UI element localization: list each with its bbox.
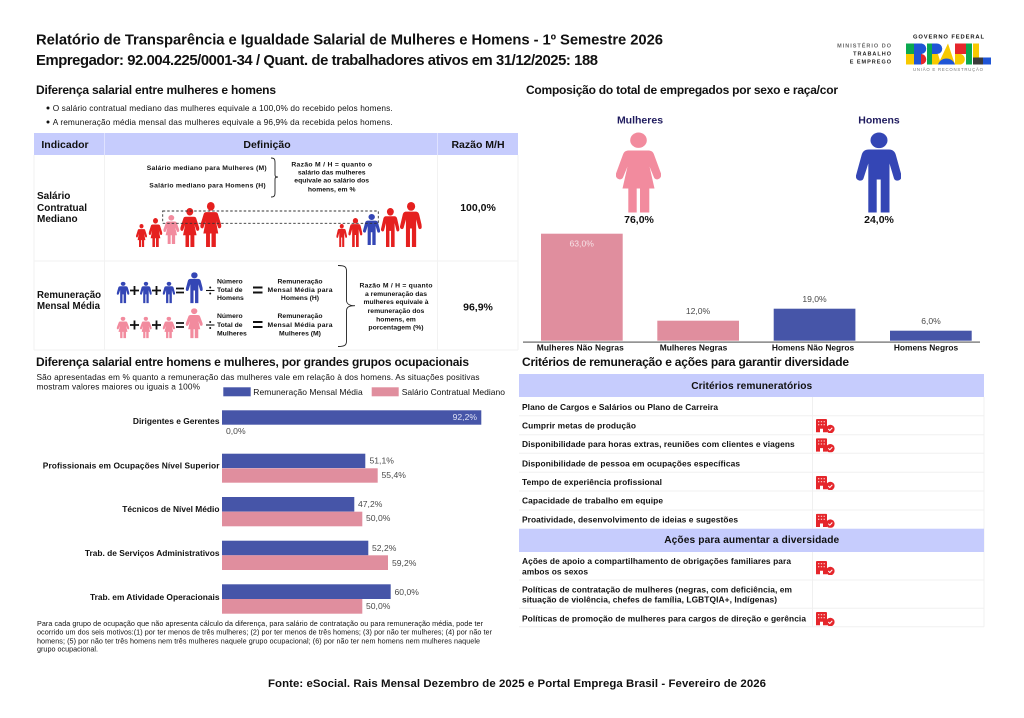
group: profissionais (43, 454, 406, 483)
header: critérios remuneratórios (519, 374, 984, 397)
group: atividade operacionais: 60,0% (394, 587, 419, 597)
group: técnicos: 50,0% (366, 513, 391, 523)
group: atividade operacionais (90, 584, 419, 614)
group: profissionais: 51,1% (370, 456, 394, 466)
row: remuneração mensal média: remuneração dos (368, 308, 425, 315)
formula: men: Número (217, 278, 243, 286)
group: técnicos: Técnicos de Nível Médio (122, 504, 220, 514)
group: serviços administrativos: 52,2% (372, 543, 397, 553)
formula: women: Mulheres (217, 330, 247, 338)
icon: women group (136, 202, 221, 247)
intro text: São apresentadas em % quanto a remuneração das mulheres vale em relação à dos homens. As situações positivas (36, 372, 480, 382)
panel: criteria table (519, 374, 984, 627)
action rows: situação de violência, chefes de família, LGBTQIA+, Indígenas) (522, 594, 777, 604)
group: técnicos: 47,2% (358, 499, 383, 509)
formula: women: Mulheres (M) (279, 330, 321, 338)
row: remuneração mensal média: homens, em (376, 316, 416, 324)
panel: indicator table (34, 133, 518, 350)
legend: Remuneração Mensal Média (253, 387, 363, 397)
logo: ministério: MINISTÉRIO DO (837, 41, 892, 49)
footnote: grupo ocupacional. (37, 645, 98, 654)
row: remuneração mensal média (37, 266, 494, 346)
action rows: Políticas de contratação de mulheres (negras, com deficiência, em (522, 585, 792, 595)
figure: mulheres 76%: 76,0% (624, 214, 655, 226)
row: remuneração mensal média: Razão M / H = quanto (360, 282, 432, 290)
icon: building check actions (816, 561, 835, 626)
group: serviços administrativos: 59,2% (392, 558, 417, 568)
group: atividade operacionais: 50,0% (366, 601, 391, 611)
header: ações (519, 529, 984, 552)
bar chart: sexo e raça/cor (523, 234, 980, 353)
bar chart: sexo e raça/cor: Mulheres Negras (660, 343, 728, 353)
row: salário contratual mediano: equivale ao salário dos (294, 178, 369, 184)
formula: women: Número (217, 313, 243, 320)
group: técnicos (122, 497, 391, 526)
table header: Razão M/H (451, 139, 505, 151)
criteria rows: Disponibilidade de pessoa em ocupações específicas (522, 458, 740, 468)
group: profissionais: Profissionais em Ocupações Nível Superior (43, 460, 220, 470)
row: remuneração mensal média: Mensal Média (37, 301, 101, 312)
icon: men group (336, 202, 422, 247)
logo: ministério: E EMPREGO (850, 60, 892, 66)
table header: Indicador (41, 139, 89, 151)
row: salário contratual mediano: Contratual (37, 203, 87, 214)
formula: men: Mensal Média para (268, 287, 333, 294)
action rows: ambos os sexos (522, 566, 588, 576)
title (36, 32, 663, 69)
action rows: Políticas de promoção de mulheres para cargos de direção e gerência (522, 614, 806, 624)
row: salário contratual mediano: homens, em % (308, 186, 355, 194)
row: remuneração mensal média: a remuneração das (365, 291, 427, 298)
logo: governo federal brasil (906, 34, 991, 72)
group: dirigentes (133, 410, 481, 436)
heading: grupos ocupacionais: Diferença salarial entre homens e mulheres, por grandes grupos ocupacionais (36, 355, 469, 369)
legend (223, 387, 505, 397)
footnote: homens; (5) por não ter três homens nem três mulheres naquele grupo ocupacional; (6) por não ter nem homens nem mulheres naquele (37, 636, 480, 645)
row: salário contratual mediano: salário das mulheres (298, 170, 366, 176)
logo: governo federal brasil: GOVERNO FEDERAL (913, 34, 984, 40)
row: salário contratual mediano: Salário (37, 191, 70, 202)
criteria rows: Disponibilidade para horas extras, reuniões com clientes e viagens (522, 439, 795, 449)
table header (34, 133, 518, 155)
formula: men: Remuneração (278, 278, 322, 286)
header: critérios remuneratórios: Critérios remuneratórios (691, 381, 813, 392)
row: salário contratual mediano: Salário mediano para Homens (H) (149, 182, 266, 190)
row: remuneração mensal média: mulheres equivale à (364, 299, 429, 306)
action rows: Ações de apoio a compartilhamento de obrigações familiares para (522, 556, 791, 566)
bar chart: sexo e raça/cor: Mulheres Não Negras (537, 343, 624, 353)
row: salário contratual mediano: Salário mediano para Mulheres (M) (147, 165, 267, 172)
bullet list: O salário contratual mediano das mulheres equivale a 100,0% do recebido pelos homens. (53, 103, 393, 113)
criteria rows: Tempo de experiência profissional (522, 477, 662, 487)
group: atividade operacionais: Trab. em Atividade Operacionais (90, 592, 220, 602)
bar chart: grupos ocupacionais (43, 410, 481, 614)
bar chart: sexo e raça/cor: Homens Negros (894, 343, 958, 353)
figure: homens 24%: 24,0% (864, 214, 895, 226)
logo: ministério: TRABALHO (853, 52, 892, 58)
row: salário contratual mediano (37, 158, 496, 247)
formula: women: Mensal Média para (268, 322, 333, 329)
formula: men: Total de (217, 287, 243, 294)
figure: homens 24% (856, 114, 902, 226)
figure: mulheres 76%: Mulheres (617, 114, 663, 126)
bullet list (46, 103, 393, 127)
title: Empregador: 92.004.225/0001-34 / Quant. de trabalhadores ativos em 31/12/2025: 188 (36, 53, 598, 69)
group: serviços administrativos (85, 541, 417, 570)
criteria rows: Cumprir metas de produção (522, 420, 636, 430)
formula: women: Total de (217, 322, 243, 329)
intro text (36, 372, 480, 392)
formula: men: Homens (217, 295, 244, 302)
table header: Definição (243, 139, 291, 151)
bar chart: sexo e raça/cor: Homens Não Negros (772, 343, 855, 353)
row: salário contratual mediano: Mediano (37, 214, 78, 225)
row: salário contratual mediano: Razão M / H = quanto o (291, 162, 372, 168)
criteria rows: Proatividade, desenvolvimento de ideias e sugestões (522, 514, 738, 524)
action rows (522, 556, 806, 624)
group: profissionais: 55,4% (382, 470, 406, 480)
icon: building check (816, 419, 835, 528)
group: serviços administrativos: Trab. de Serviços Administrativos (85, 548, 220, 558)
criteria rows: Plano de Cargos e Salários ou Plano de Carreira (522, 402, 718, 412)
intro text: mostram valores maiores ou iguais a 100% (36, 382, 201, 392)
logo: ministério (837, 41, 892, 66)
formula: women (117, 308, 333, 338)
row: remuneração mensal média: 96,9% (463, 302, 494, 314)
row: remuneração mensal média: Remuneração (37, 290, 101, 301)
heading: diferença salarial: Diferença salarial entre mulheres e homens (36, 83, 276, 97)
heading: composição: Composição do total de empregados por sexo e raça/cor (526, 83, 838, 97)
group: dirigentes: Dirigentes e Gerentes (133, 416, 220, 426)
formula: men: Homens (H) (281, 295, 319, 302)
figure: homens 24%: Homens (858, 114, 900, 126)
bar chart: sexo e raça/cor: 19,0% (802, 294, 827, 304)
heading: critérios: Critérios de remuneração e ações para garantir diversidade (522, 355, 849, 369)
footnote (37, 619, 493, 654)
formula: men (117, 272, 333, 303)
row: salário contratual mediano: 100,0% (460, 202, 496, 214)
formula: women: Remuneração (278, 313, 322, 320)
group: dirigentes: 0,0% (226, 426, 246, 436)
legend: Salário Contratual Mediano (402, 387, 505, 397)
bar chart: sexo e raça/cor: 6,0% (921, 316, 941, 326)
criteria rows: Capacidade de trabalho em equipe (522, 496, 663, 506)
bar chart: sexo e raça/cor: 63,0% (570, 239, 594, 249)
criteria rows (522, 402, 795, 524)
logo: governo federal brasil: UNIÃO E RECONSTRUÇÃO (913, 67, 984, 72)
footer source: Fonte: eSocial. Rais Mensal Dezembro de 2025 e Portal Emprega Brasil - Fevereiro de 2026 (268, 678, 766, 690)
footnote: Para cada grupo de ocupação que não apresenta cálculo da diferença, para salário de contratação ou para remuneração média, pode ter (37, 619, 484, 628)
footnote: ocorrido um dos seis motivos:(1) por ter menos de três mulheres; (2) por ter menos de três homens; (3) por não ter mulheres; (4) por não ter (37, 628, 493, 637)
header: ações: Ações para aumentar a diversidade (664, 535, 840, 546)
title: Relatório de Transparência e Igualdade Salarial de Mulheres e Homens - 1º Semestre 2026 (36, 32, 663, 48)
figure: mulheres 76% (616, 114, 663, 226)
bar chart: sexo e raça/cor: 12,0% (686, 306, 711, 316)
row: remuneração mensal média: porcentagem (%) (368, 324, 424, 332)
group: dirigentes: 92,2% (453, 412, 477, 422)
bullet list: A remuneração média mensal das mulheres equivale a 96,9% da recebida pelos homens. (53, 117, 393, 127)
